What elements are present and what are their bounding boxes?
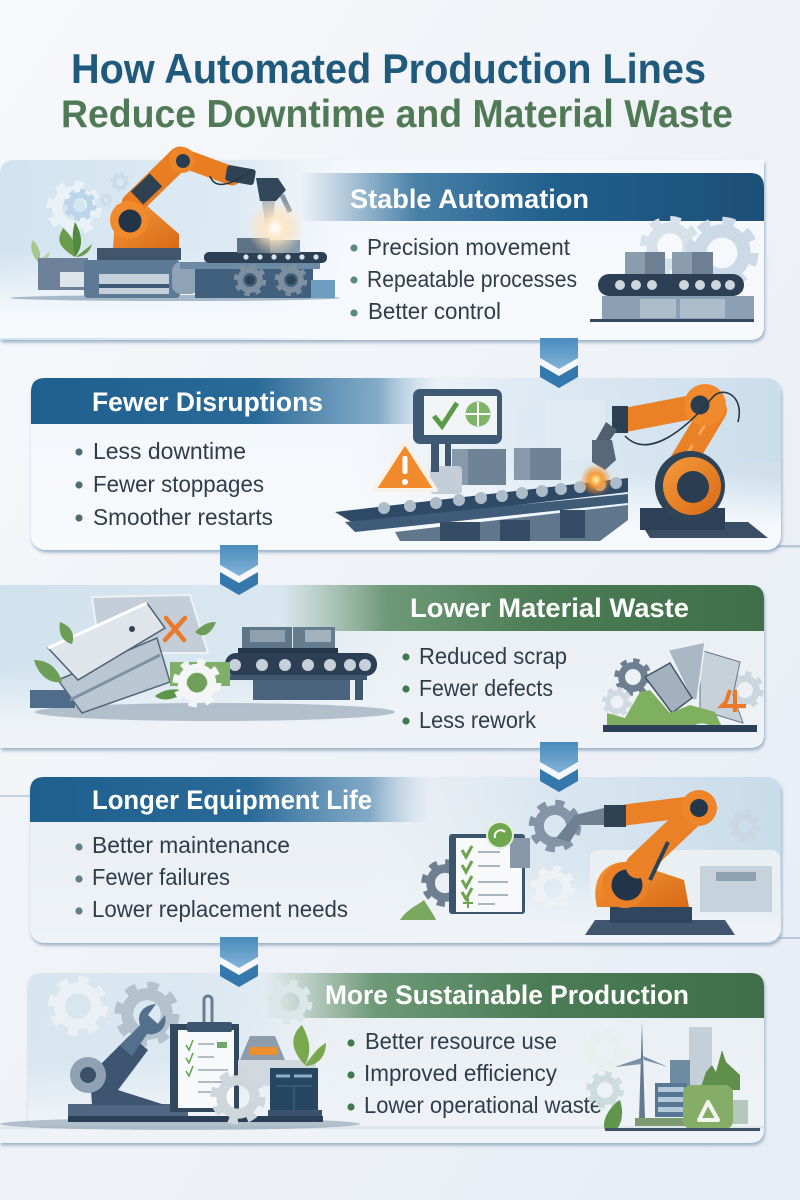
panel 5 bullets: Improved efficiency	[364, 1060, 557, 1086]
panel 2 header	[31, 378, 440, 424]
icon: orange robot arm	[580, 384, 768, 538]
machine: sloped conveyor	[335, 448, 628, 541]
arrow 2	[220, 545, 258, 595]
panel: lower material waste	[0, 585, 764, 748]
icon: checklist	[449, 822, 530, 914]
panel 4 header	[30, 777, 430, 822]
panel 3 bullets: Less rework	[419, 707, 536, 733]
panel 3 bullets	[402, 643, 567, 733]
panel 3 bullets: Reduced scrap	[419, 643, 567, 669]
panel 5 bullets: Lower operational waste	[364, 1092, 602, 1118]
panel 5 bullets	[347, 1028, 602, 1118]
panel 3 bullets: Fewer defects	[419, 675, 553, 701]
panel 4 bullets: Better maintenance	[92, 832, 290, 858]
icon: monitor	[413, 389, 502, 472]
machine: main conveyor	[10, 238, 340, 301]
icon: right scrap pile	[603, 642, 761, 732]
icon: scrap sheets	[48, 595, 208, 713]
panel 1 bullets: Precision movement	[367, 234, 571, 260]
panel 5 header: More Sustainable Production	[325, 980, 689, 1010]
panel 3 header: Lower Material Waste	[410, 593, 689, 623]
panel 2 bullets: Fewer stoppages	[93, 471, 264, 497]
arrow 1	[540, 338, 578, 388]
machine: wrench arm	[0, 1004, 360, 1130]
panel: longer equipment life	[0, 777, 800, 943]
icon: gears and leaf	[400, 804, 577, 920]
panel: more sustainable production	[0, 973, 764, 1143]
panel 4 header: Longer Equipment Life	[92, 785, 372, 815]
panel 5 header	[265, 973, 764, 1018]
icon: clipboard	[170, 996, 239, 1112]
panel 2 header: Fewer Disruptions	[92, 387, 323, 417]
title: How Automated Production Lines	[71, 45, 706, 92]
icon: plants	[31, 222, 92, 264]
panel 4 bullets: Lower replacement needs	[92, 896, 348, 922]
machine: control unit	[238, 1036, 322, 1116]
icon: orange robot arm	[556, 790, 735, 935]
panel 4 bullets	[75, 832, 348, 922]
icon: orange x	[165, 618, 185, 640]
icon: leaves and white gear	[34, 622, 230, 703]
panel 2 bullets	[75, 438, 273, 530]
icon: green city with turbine and recycling bin	[604, 1022, 760, 1131]
panel 2 bullets: Smoother restarts	[93, 504, 273, 530]
arrow 4	[220, 937, 258, 987]
icon: light gears	[51, 174, 752, 283]
panel 5 bullets: Better resource use	[365, 1028, 557, 1054]
icon: warning triangle	[374, 442, 436, 490]
panel 1 bullets	[350, 234, 577, 324]
panel 1 bullets: Better control	[368, 298, 501, 324]
icon: white gear	[215, 1074, 261, 1120]
icon: leaf	[293, 1025, 326, 1066]
machine: small conveyor	[590, 252, 754, 322]
panel 1 header	[300, 173, 764, 221]
panel 1 header: Stable Automation	[350, 184, 589, 214]
panel 2 bullets: Less downtime	[93, 438, 246, 464]
panel: fewer disruptions	[31, 378, 800, 550]
panel 4 bullets: Fewer failures	[92, 864, 230, 890]
icon: background gears	[53, 981, 624, 1106]
icon: orange robot arm	[97, 147, 303, 260]
panel: stable automation	[0, 147, 764, 340]
machine: conveyor	[30, 627, 395, 721]
title: Reduce Downtime and Material Waste	[61, 93, 733, 136]
title	[61, 45, 733, 136]
arrow 3	[540, 742, 578, 792]
icon: background factory	[534, 812, 780, 912]
icon: background gear and windows	[518, 389, 781, 476]
panel 1 bullets: Repeatable processes	[367, 266, 577, 292]
panel 3 header	[280, 585, 764, 631]
